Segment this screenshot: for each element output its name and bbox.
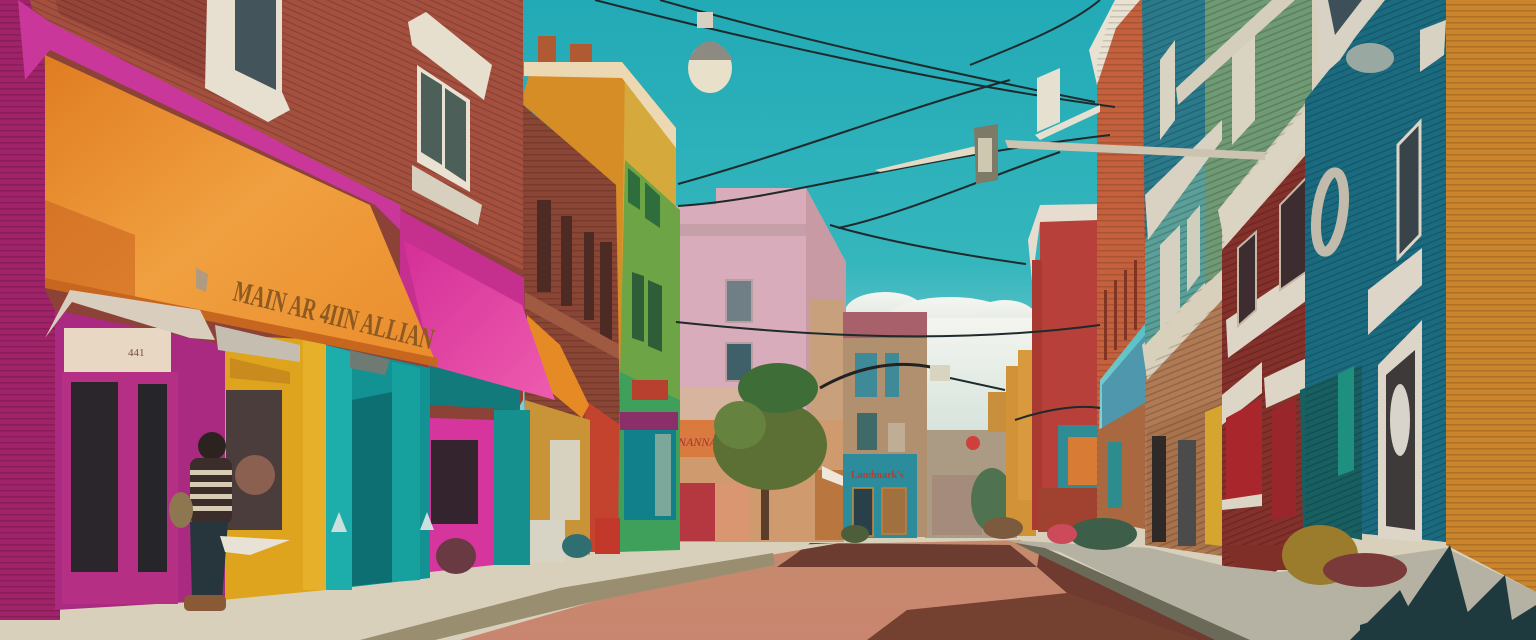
building: magenta brick left edge — [0, 0, 60, 620]
right sidewalk — [1005, 540, 1536, 640]
traffic signal and arm — [875, 68, 1265, 184]
building: tan small: Landmark's — [851, 470, 904, 481]
building: tan small — [843, 312, 927, 538]
building: red right — [1028, 204, 1098, 532]
building: teal brick — [1300, 0, 1446, 542]
building: upper brick left — [0, 0, 523, 600]
orange small awning — [527, 315, 589, 418]
left sidewalk — [0, 543, 840, 640]
bush right — [1282, 525, 1407, 587]
building: orange brick far right — [1446, 0, 1536, 592]
magenta storefront with door — [55, 310, 225, 610]
building: maroon brick — [1222, 150, 1362, 572]
person — [169, 432, 290, 611]
tree — [713, 363, 827, 540]
building: pink corner: NANNAME — [677, 435, 735, 449]
ground: road — [460, 540, 1210, 640]
clouds — [845, 292, 1039, 433]
teal storefront — [326, 345, 434, 590]
yellow storefront — [222, 335, 326, 600]
building: orange-red tall — [1089, 0, 1150, 530]
planter flowers left — [562, 534, 592, 558]
magenta awning frame — [18, 0, 405, 235]
magenta storefront with door: 441 — [128, 347, 144, 359]
pink awning — [403, 240, 555, 400]
building: brown mid — [523, 105, 626, 552]
hanging wires — [595, 0, 1115, 420]
building: pink corner — [676, 188, 846, 542]
road shadows — [777, 543, 1218, 640]
orange awning — [45, 55, 437, 367]
wreath — [1312, 171, 1348, 253]
right flowers — [841, 517, 1137, 550]
plant by teal shop — [436, 538, 476, 574]
awning bracket — [45, 290, 215, 340]
building: blue and green upper — [1142, 0, 1325, 345]
building: tan siding lower — [1142, 265, 1222, 556]
distant buildings — [925, 350, 1038, 538]
wall lamp — [1346, 43, 1394, 73]
pink storefront — [400, 210, 530, 572]
storefront: narrow shops — [520, 400, 620, 562]
street lamp — [688, 12, 733, 93]
sky — [500, 0, 1150, 440]
awning lettering: MAIN AR 4IIN ALLIAN — [230, 275, 437, 356]
street light arm — [820, 364, 950, 388]
building: orange and green tall — [524, 36, 680, 552]
agave plant — [1350, 545, 1536, 640]
lamp bracket box — [215, 325, 300, 362]
